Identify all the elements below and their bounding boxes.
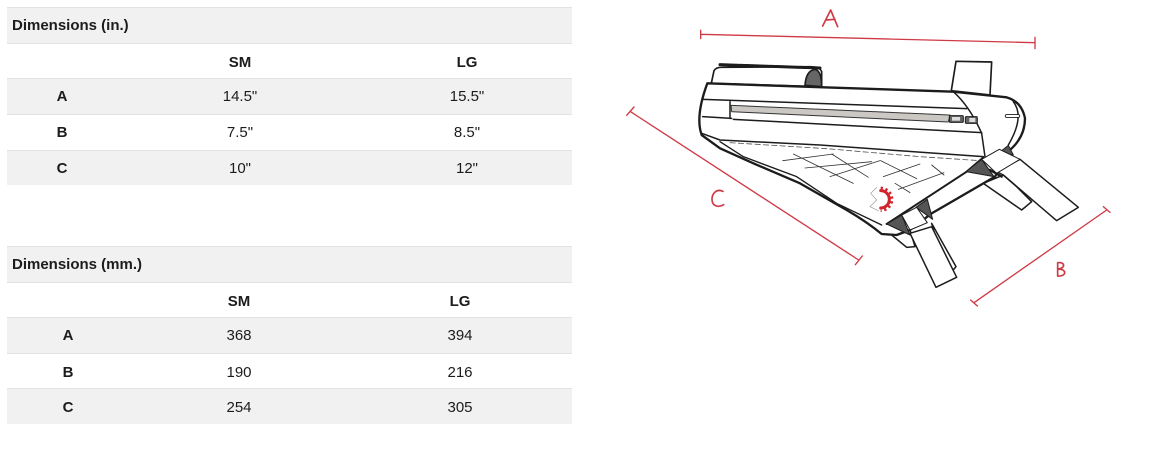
zipper pull [949,116,977,123]
size header row: LG [457,54,477,71]
size header row: SM [229,54,251,71]
row C: C [63,399,73,416]
row A [7,317,572,353]
row B: 8.5" [454,124,480,141]
bag straps behind body [892,159,1078,287]
row A: 368 [226,327,252,344]
row C: 12" [456,160,478,177]
row A [7,78,572,114]
row A: 14.5" [223,88,257,105]
table: dimensions in millimetres [7,246,572,424]
table heading: Dimensions (in.) [7,7,572,44]
size header row: SM [228,293,250,310]
bag seams [702,92,1018,225]
row A: A [63,327,73,344]
row B: 190 [226,364,252,381]
logo: leather and gear [870,187,891,211]
bag body [699,83,1025,235]
row C: 254 [226,399,252,416]
row C: 10" [229,160,251,177]
dimension B [971,207,1110,306]
top tube strap: front block [951,61,992,95]
dashed stitching [730,143,980,161]
row A: 15.5" [450,88,484,105]
size header row: LG [450,293,470,310]
size header row [7,282,572,318]
table heading: Dimensions (mm.): Dimensions (mm.) [12,256,142,273]
row C: 305 [447,399,473,416]
table heading: Dimensions (mm.) [7,246,572,283]
buckle anchors [887,145,1013,235]
size header row [7,43,572,79]
row C [7,150,572,185]
table: dimensions in inches [7,7,572,185]
dimension C [627,107,862,265]
row C: C [57,160,67,177]
buckle and loop [990,170,1002,177]
label tabs [902,149,1020,230]
row B [7,114,572,150]
cross stitching panel [783,154,944,193]
row B: 216 [447,364,473,381]
row B: 7.5" [227,124,253,141]
row A: A [57,88,67,105]
row B: B [63,364,73,381]
zipper [731,105,950,122]
row B [7,353,572,389]
table heading: Dimensions (in.): Dimensions (in.) [12,17,129,34]
dimension A [701,10,1035,49]
row B: B [57,124,67,141]
row C [7,388,572,424]
top tube strap: rear roll [711,65,822,87]
row A: 394 [447,327,473,344]
